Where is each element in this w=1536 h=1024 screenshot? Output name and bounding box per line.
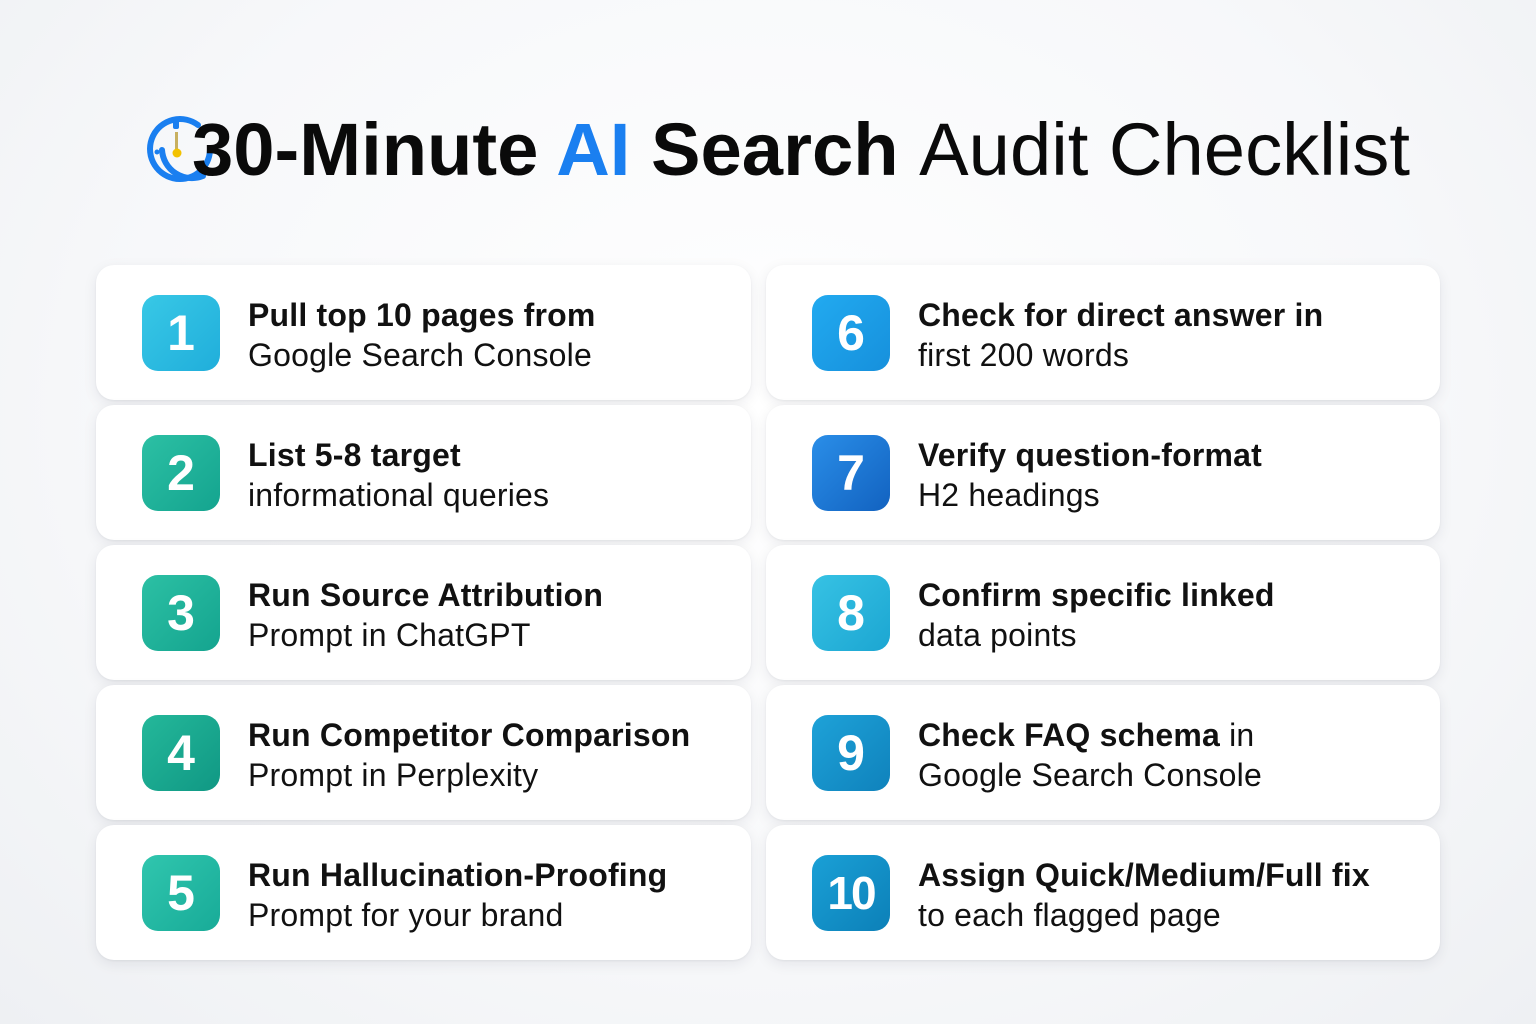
icon: stopwatch — [150, 117, 210, 179]
card 2: List 5-8 target — [248, 437, 461, 473]
card 9: 9 — [837, 725, 865, 781]
card 10: to each flagged page — [918, 897, 1221, 933]
card 8 — [766, 545, 1440, 680]
card 10: 10 — [827, 867, 875, 919]
card 5: Run Hallucination-Proofing — [248, 857, 667, 893]
card 1: 1 — [167, 305, 195, 361]
card 9: Check FAQ schema in — [918, 717, 1254, 753]
card 2: 2 — [167, 445, 195, 501]
card 4: Run Competitor Comparison — [248, 717, 690, 753]
card 1 — [96, 265, 751, 400]
title: 30-Minute AI Search Audit Checklist — [192, 108, 1410, 191]
card 7: Verify question-format — [918, 437, 1262, 473]
card 10 — [766, 825, 1440, 960]
card 7: H2 headings — [918, 477, 1100, 513]
card 4: Prompt in Perplexity — [248, 757, 538, 793]
card 6: Check for direct answer in — [918, 297, 1323, 333]
card 3: Prompt in ChatGPT — [248, 617, 531, 653]
card 8: 8 — [837, 585, 865, 641]
card 2 — [96, 405, 751, 540]
card 1: Pull top 10 pages from — [248, 297, 596, 333]
card 7: 7 — [837, 445, 865, 501]
card 7 — [766, 405, 1440, 540]
card 5: Prompt for your brand — [248, 897, 563, 933]
card 4: 4 — [167, 725, 195, 781]
card 3: Run Source Attribution — [248, 577, 603, 613]
card 4 — [96, 685, 751, 820]
card 9: Google Search Console — [918, 757, 1262, 793]
card 8: data points — [918, 617, 1077, 653]
card 6: first 200 words — [918, 337, 1129, 373]
card 6: 6 — [837, 305, 865, 361]
card 3: 3 — [167, 585, 195, 641]
card 3 — [96, 545, 751, 680]
card 10: Assign Quick/Medium/Full fix — [918, 857, 1370, 893]
card 6 — [766, 265, 1440, 400]
card 2: informational queries — [248, 477, 549, 513]
card 5: 5 — [167, 865, 195, 921]
card 8: Confirm specific linked — [918, 577, 1275, 613]
card 9 — [766, 685, 1440, 820]
card 5 — [96, 825, 751, 960]
card 1: Google Search Console — [248, 337, 592, 373]
